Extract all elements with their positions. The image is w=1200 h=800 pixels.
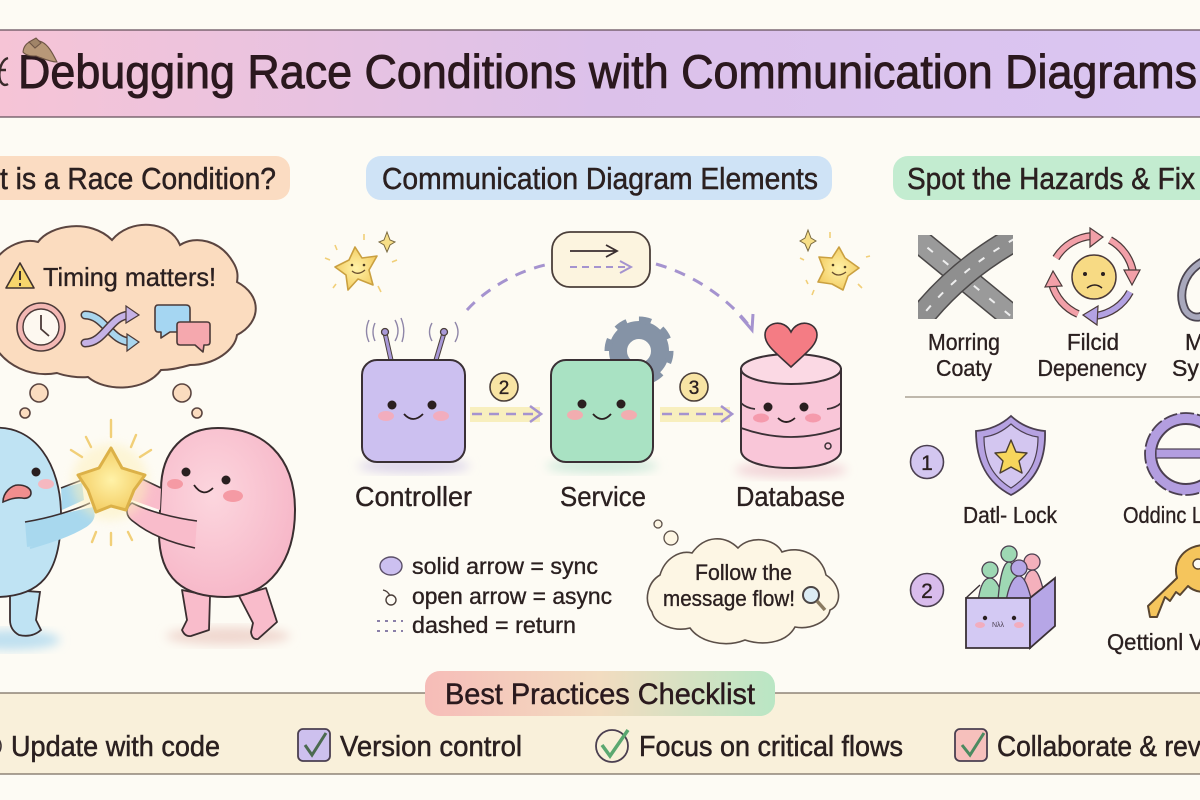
legend: dashed = return: [412, 612, 576, 638]
arrow step 2: [470, 373, 541, 422]
text: message flow: message flow!: [663, 586, 795, 611]
icon: antennas: [366, 318, 458, 360]
heading pill: best practices: [425, 671, 775, 716]
icon: magnifier edge: [0, 58, 8, 85]
panel: spot the hazards and fixes: [893, 156, 1200, 655]
legend: solid arrow = sync: [412, 553, 598, 579]
heading pill: best practices: Best Practices Checklist: [445, 678, 756, 711]
icon: hook partial: [1182, 262, 1200, 317]
icon: crossing arrows: [85, 306, 139, 351]
icon: crossing roads: [918, 235, 1013, 319]
icon: warning triangle: [6, 263, 34, 288]
label: database: Database: [736, 481, 845, 512]
badge 2: [910, 574, 944, 606]
thought bubbles: [20, 384, 202, 418]
icon: smiling star right: [800, 230, 870, 295]
text: follow the: Follow the: [695, 560, 792, 585]
icon: heart: [765, 323, 817, 367]
badge 1: 1: [921, 452, 933, 475]
character: blue worried: [0, 428, 95, 650]
dashed arc arrow: [467, 264, 753, 330]
message legend pill: [552, 232, 650, 287]
icon: golden star with rays: [71, 420, 151, 545]
label: partial sync: [1172, 329, 1200, 381]
arrow step 2: 2: [499, 378, 509, 399]
label: filcid dependency: [1038, 329, 1147, 381]
character: pink happy: [126, 428, 295, 645]
checklist item: version control: Version control: [340, 731, 522, 763]
icon: chat bubbles: [155, 305, 210, 352]
legend: [377, 553, 612, 638]
object: controller: [355, 318, 472, 512]
panel: best practices checklist: [0, 671, 1200, 774]
icon: purple gear: [1145, 413, 1200, 495]
icon: box of figures: [966, 546, 1055, 648]
text: timing matters: Timing matters!: [43, 262, 216, 292]
checklist item: update with code: Update with code: [11, 731, 220, 763]
checklist item: focus on critical flows: Focus on critical flows: [639, 731, 903, 763]
icon: gear: [608, 320, 670, 382]
arrow step 3: [660, 373, 732, 422]
label: data lock: Datl- Lock: [963, 502, 1057, 528]
heading pill: diagram elements: Communication Diagram Elements: [382, 161, 818, 196]
thought cloud: follow the message flow: [647, 520, 839, 644]
icon: detective hat: [23, 38, 57, 62]
label: morring coaty: [928, 329, 1000, 381]
icon: clock: [17, 303, 65, 351]
badge 1: [910, 446, 944, 478]
icon: circular dependency: [1045, 228, 1140, 325]
panel: communication diagram elements: [325, 156, 870, 644]
label: morring coaty: Coaty: [936, 355, 992, 381]
badge 2: 2: [921, 580, 933, 603]
object: database: [735, 323, 847, 512]
legend: open arrow = async: [412, 583, 612, 609]
icon: box of figures: Nλλ: [992, 622, 1005, 629]
object: service: [546, 360, 658, 512]
panel: what is a race condition: [0, 156, 295, 650]
icon: shield: [976, 416, 1045, 495]
arrow step 3: 3: [689, 378, 699, 399]
divider: [905, 396, 1200, 398]
label: filcid dependency: Filcid: [1067, 329, 1119, 355]
icon: smiling star left: [325, 232, 397, 292]
heading pill: race condition: t is a Race Condition?: [0, 161, 276, 196]
label: controller: Controller: [355, 481, 472, 512]
icon: worried face: [1072, 255, 1116, 299]
thought cloud: timing matters: [0, 225, 256, 387]
label: morring coaty: Morring: [928, 329, 1000, 355]
label: service: Service: [560, 481, 646, 512]
icon: magnifier: [803, 587, 825, 610]
label: filcid dependency: Depenency: [1038, 355, 1147, 381]
title banner: [0, 30, 1200, 117]
icon: key: [1148, 545, 1200, 617]
